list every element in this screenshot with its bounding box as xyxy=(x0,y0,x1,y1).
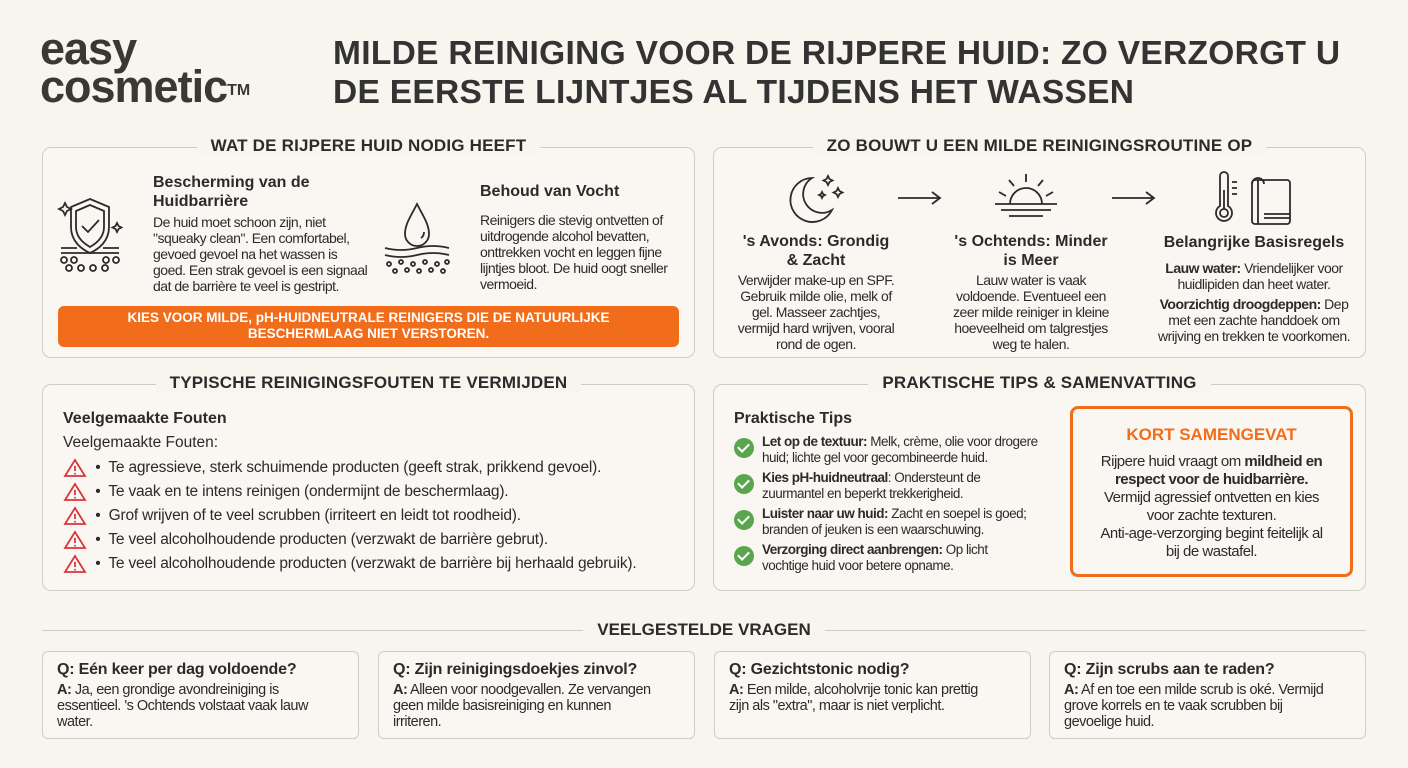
faq 4: A: Af en toe een milde scrub is oké. Vermijd xyxy=(1064,682,1323,698)
panel: routine xyxy=(713,147,1366,358)
tips list: Let op de textuur: Melk, crème, olie voor drogere xyxy=(762,434,1038,449)
faq 3: A: Een milde, alcoholvrije tonic kan prettig xyxy=(729,682,978,698)
callout: summary: Anti-age-verzorging begint feitelijk al xyxy=(1100,525,1323,542)
mistakes list: • Grof wrijven of te veel scrubben (irriteert en leidt tot roodheid). xyxy=(95,507,521,524)
arrow xyxy=(1112,191,1156,205)
step: morning xyxy=(953,233,1109,352)
text: ZO BOUWT U EEN MILDE REINIGINGSROUTINE OP xyxy=(827,136,1252,155)
FAQ heading: VEELGESTELDE VRAGEN xyxy=(597,620,811,639)
text: moisture: Behoud van Vocht xyxy=(480,183,619,200)
faq 1: water. xyxy=(57,714,93,730)
faq 3: Q: Gezichtstonic nodig? xyxy=(729,661,909,678)
text: PRAKTISCHE TIPS & SAMENVATTING xyxy=(882,373,1197,392)
step: evening xyxy=(738,233,894,352)
tips list: zuurmantel en beperkt trekkerigheid. xyxy=(762,486,963,501)
icon: drop xyxy=(384,202,450,274)
text: barrier: goed. Een strak gevoel is een signaal xyxy=(153,262,367,278)
logo xyxy=(40,23,250,112)
step: evening: vermijd hard wrijven, vooral xyxy=(738,320,894,336)
arrow xyxy=(898,191,942,205)
mistakes list: • Te vaak en te intens reinigen (ondermijnt de beschermlaag). xyxy=(95,483,508,500)
tips list: Luister naar uw huid: Zacht en soepel is goed; xyxy=(762,506,1026,521)
faq 3 xyxy=(714,651,1031,739)
text: moisture: lijntjes bloot. De huid oogt sneller xyxy=(480,260,667,276)
callout banner xyxy=(58,306,679,347)
faq 1 xyxy=(42,651,359,739)
step: morning: is Meer xyxy=(1003,252,1059,269)
tips list: Praktische Tips xyxy=(734,410,852,427)
icon: sunrise xyxy=(995,174,1057,217)
faq 4: Q: Zijn scrubs aan te raden? xyxy=(1064,661,1274,678)
logo: cosmeticTM xyxy=(40,61,250,112)
tips list xyxy=(734,410,1038,573)
text: barrier: "squeaky clean". Een comfortabel, xyxy=(153,230,350,246)
faq 4 xyxy=(1049,651,1366,739)
panel: tips & summary xyxy=(713,384,1366,591)
mistakes list: • Te agressieve, sterk schuimende producten (geeft strak, prikkend gevoel). xyxy=(95,459,601,476)
text: barrier: dat de barrière te veel is gestript. xyxy=(153,278,339,294)
logo: easy xyxy=(40,23,136,74)
tips list: Kies pH-huidneutraal: Ondersteunt de xyxy=(762,470,980,485)
faq 1: essentieel. 's Ochtends volstaat vaak lauw xyxy=(57,698,308,714)
tips list: Verzorging direct aanbrengen: Op licht xyxy=(762,542,988,557)
step: evening: 's Avonds: Grondig xyxy=(743,233,889,250)
faq 1: Q: Eén keer per dag voldoende? xyxy=(57,661,296,678)
step: morning: Lauw water is vaak xyxy=(976,272,1086,288)
callout: summary: Rijpere huid vraagt om mildheid en xyxy=(1101,453,1322,470)
icon: moon xyxy=(790,174,844,223)
step: morning: weg te halen. xyxy=(993,336,1069,352)
title: DE EERSTE LIJNTJES AL TIJDENS HET WASSEN xyxy=(333,74,1134,111)
text: moisture: Reinigers die stevig ontvetten of xyxy=(480,212,663,228)
rules: Voorzichtig droogdeppen: Dep xyxy=(1160,296,1348,312)
step: evening: rond de ogen. xyxy=(776,336,856,352)
callout: summary: bij de wastafel. xyxy=(1166,543,1257,560)
text: moisture: uitdrogende alcohol bevatten, xyxy=(480,228,649,244)
tips list: huid; lichte gel voor gecombineerde huid. xyxy=(762,450,988,465)
callout: summary: voor zachte texturen. xyxy=(1147,507,1276,524)
text: moisture: vermoeid. xyxy=(480,276,537,292)
mistakes list: • Te veel alcoholhoudende producten (verzwakt de barrière bij herhaald gebruik). xyxy=(95,555,636,572)
title xyxy=(333,35,1340,111)
step: evening: Verwijder make-up en SPF. xyxy=(738,272,894,288)
icon: thermometer and towel xyxy=(1215,171,1291,225)
rules: wrijving en trekken te voorkomen. xyxy=(1158,328,1350,344)
rules: huidlipiden dan heet water. xyxy=(1177,276,1331,292)
step: evening: gel. Masseer zachtjes, xyxy=(752,304,880,320)
callout banner: BESCHERMLAAG NIET VERSTOREN. xyxy=(248,326,489,341)
callout: summary: respect voor de huidbarrière. xyxy=(1115,471,1308,488)
mistakes list: Veelgemaakte Fouten: xyxy=(63,434,218,451)
text: barrier xyxy=(153,174,367,294)
mistakes list: Veelgemaakte Fouten xyxy=(63,410,227,427)
tips list: vochtige huid voor betere opname. xyxy=(762,558,953,573)
text: TYPISCHE REINIGINGSFOUTEN TE VERMIJDEN xyxy=(170,373,567,392)
step: morning: 's Ochtends: Minder xyxy=(954,233,1108,250)
faq 3: zijn als "extra", maar is niet verplicht. xyxy=(729,698,944,714)
text: barrier: Huidbarrière xyxy=(153,193,248,210)
mistakes list: • Te veel alcoholhoudende producten (verzwakt de barrière gebrut). xyxy=(95,531,548,548)
faq 2: geen milde basisreiniging en kunnen xyxy=(393,698,611,714)
callout: summary: KORT SAMENGEVAT xyxy=(1126,425,1297,444)
callout: summary: Vermijd agressief ontvetten en kies xyxy=(1104,489,1319,506)
rules: Lauw water: Vriendelijker voor xyxy=(1165,260,1343,276)
step: morning: zeer milde reiniger in kleine xyxy=(953,304,1109,320)
text: moisture xyxy=(480,183,668,292)
panel: mistakes xyxy=(42,384,695,591)
faq 4: grove korrels en te vaak scrubben bij xyxy=(1064,698,1282,714)
text: barrier: Bescherming van de xyxy=(153,174,310,191)
callout: summary xyxy=(1070,406,1353,577)
faq 2 xyxy=(378,651,695,739)
step: evening: & Zacht xyxy=(787,252,845,269)
faq 2: A: Alleen voor noodgevallen. Ze vervangen xyxy=(393,682,651,698)
tips list: branden of jeuken is een waarschuwing. xyxy=(762,522,984,537)
step: morning: hoeveelheid om talgrestjes xyxy=(954,320,1108,336)
faq 4: gevoelige huid. xyxy=(1064,714,1154,730)
callout banner: KIES VOOR MILDE, pH-HUIDNEUTRALE REINIGERS DIE DE NATUURLIJKE xyxy=(127,310,610,325)
text: barrier: gevoed gevoel na het wassen is xyxy=(153,246,337,262)
title: MILDE REINIGING VOOR DE RIJPERE HUID: ZO VERZORGT U xyxy=(333,35,1340,72)
panel: what mature skin needs xyxy=(42,147,695,358)
text: moisture: onttrekken vocht en leggen fijne xyxy=(480,244,662,260)
rules xyxy=(1158,234,1350,344)
text: barrier: De huid moet schoon zijn, niet xyxy=(153,214,326,230)
faq 2: irriteren. xyxy=(393,714,441,730)
rules: met een zachte handdoek om xyxy=(1168,312,1340,328)
mistakes list xyxy=(63,410,636,573)
step: evening: Gebruik milde olie, melk of xyxy=(740,288,892,304)
icon: shield xyxy=(57,198,123,272)
rules: Belangrijke Basisregels xyxy=(1164,234,1344,251)
faq 2: Q: Zijn reinigingsdoekjes zinvol? xyxy=(393,661,637,678)
faq 1: A: Ja, een grondige avondreiniging is xyxy=(57,682,279,698)
step: morning: voldoende. Eventueel een xyxy=(956,288,1106,304)
text: WAT DE RIJPERE HUID NODIG HEEFT xyxy=(211,136,526,155)
